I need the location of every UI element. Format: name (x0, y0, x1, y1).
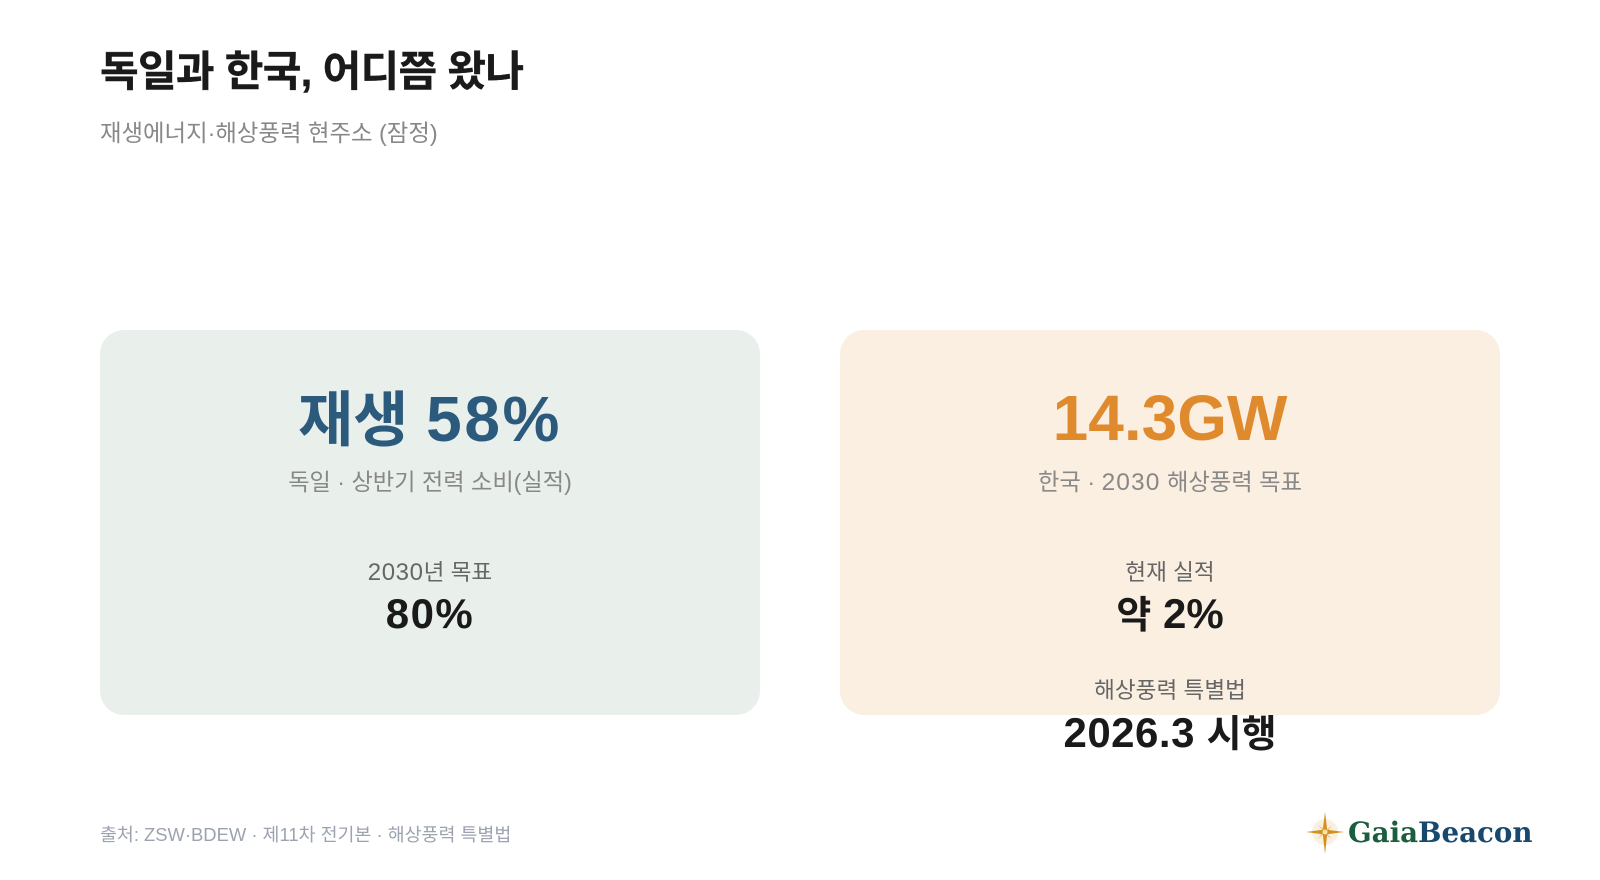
logo wordmark: GaiaBeacon (1348, 816, 1532, 849)
logo: GaiaBeacon (1306, 812, 1532, 854)
Korea hero stat: 14.3GW (1053, 382, 1287, 454)
subtitle: 재생에너지·해상풍력 현주소 (잠정) (100, 120, 438, 146)
icon: beacon star (1306, 812, 1344, 854)
title: 독일과 한국, 어디쯤 왔나 (100, 48, 523, 95)
Korea current label: 현재 실적 (1125, 560, 1215, 585)
Germany hero label: 독일 · 상반기 전력 소비(실적) (288, 469, 572, 495)
panel: Germany card (100, 330, 760, 715)
Germany target value: 80% (386, 590, 474, 637)
panel: Korea card (840, 330, 1500, 715)
Korea law value: 2026.3 시행 (1063, 709, 1277, 756)
Korea current value: 약 2% (1116, 590, 1224, 637)
Korea law label: 해상풍력 특별법 (1094, 678, 1246, 703)
Germany hero stat: 재생 58% (298, 383, 562, 455)
Korea hero label: 한국 · 2030 해상풍력 목표 (1038, 469, 1302, 496)
Germany target label: 2030년 목표 (368, 559, 492, 586)
source note: 출처: ZSW·BDEW · 제11차 전기본 · 해상풍력 특별법 (100, 824, 511, 845)
